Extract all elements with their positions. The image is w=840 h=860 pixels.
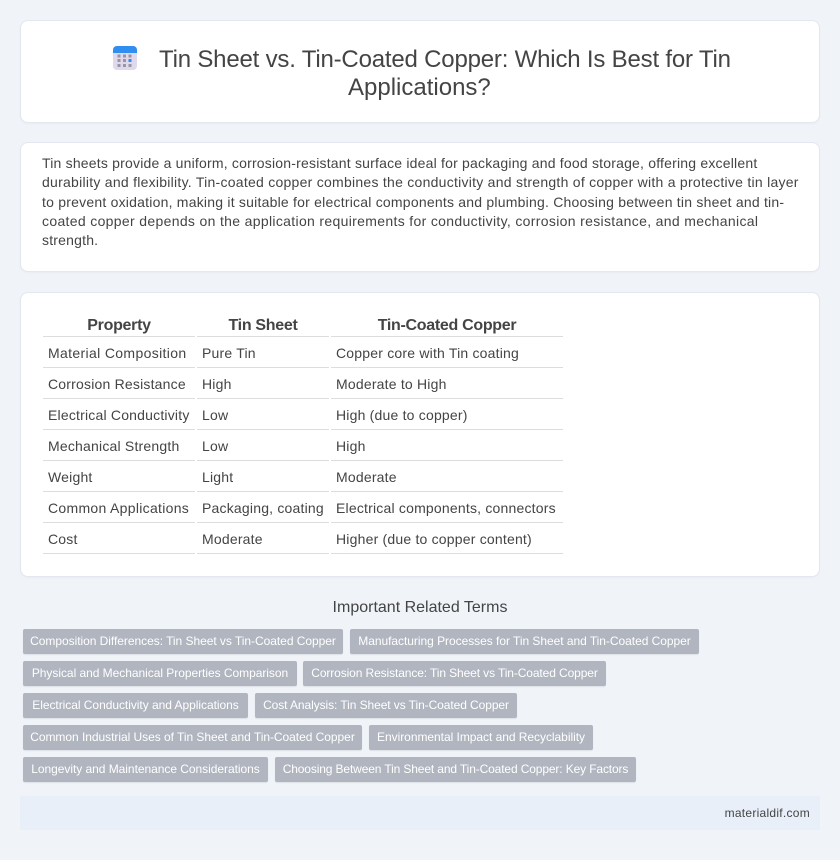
related term tags: Manufacturing Processes for Tin Sheet and Tin-Coated Copper	[358, 634, 691, 648]
comparison table: Low	[202, 407, 228, 423]
comparison table: Packaging, coating	[202, 500, 324, 516]
comparison table: High	[202, 376, 232, 392]
related term tags: Electrical Conductivity and Applications	[32, 698, 239, 712]
related term tags: Corrosion Resistance: Tin Sheet vs Tin-Coated Copper	[311, 666, 598, 680]
heading: related terms: Important Related Terms	[333, 599, 507, 616]
panel: title header	[20, 20, 820, 123]
related term tags	[23, 629, 699, 783]
related term tags: Composition Differences: Tin Sheet vs Tin-Coated Copper	[30, 634, 336, 648]
related term tags: Physical and Mechanical Properties Comparison	[32, 666, 288, 680]
related term tags: Common Industrial Uses of Tin Sheet and Tin-Coated Copper	[30, 730, 355, 744]
title: Applications?	[348, 74, 491, 101]
text block: introduction: strength.	[42, 232, 98, 248]
panel: comparison table	[20, 292, 820, 577]
comparison table: Cost	[48, 531, 78, 547]
comparison table	[43, 317, 563, 554]
comparison table: Common Applications	[48, 500, 189, 516]
related term tags: Longevity and Maintenance Considerations	[31, 762, 260, 776]
related term tags: Cost Analysis: Tin Sheet vs Tin-Coated Copper	[263, 698, 509, 712]
comparison table: Moderate	[202, 531, 263, 547]
comparison table: Corrosion Resistance	[48, 376, 186, 392]
comparison table: Material Composition	[48, 345, 186, 361]
related term tags: Choosing Between Tin Sheet and Tin-Coated Copper: Key Factors	[283, 762, 628, 776]
icon: calendar	[113, 46, 137, 70]
text block: introduction: to prevent oxidation, making it suitable for electrical components and plumbing. Choosing between tin sheet and tin-	[42, 194, 784, 210]
text block: introduction: coated copper depends on the application requirements for conductivity, corrosion resistance, and mechanical	[42, 213, 758, 229]
comparison table: Low	[202, 438, 228, 454]
comparison table: Light	[202, 469, 233, 485]
comparison table: High (due to copper)	[336, 407, 468, 423]
comparison table: Copper core with Tin coating	[336, 345, 519, 361]
comparison table: Moderate	[336, 469, 397, 485]
comparison table: Mechanical Strength	[48, 438, 179, 454]
panel: introduction	[20, 142, 820, 272]
comparison table: Property	[87, 317, 151, 334]
related term tags: Environmental Impact and Recyclability	[377, 730, 585, 744]
comparison table: Electrical Conductivity	[48, 407, 190, 423]
comparison table: High	[336, 438, 366, 454]
comparison table: Tin-Coated Copper	[378, 317, 516, 334]
title: Tin Sheet vs. Tin-Coated Copper: Which Is Best for Tin	[159, 46, 731, 73]
comparison table: Electrical components, connectors	[336, 500, 556, 516]
comparison table: Higher (due to copper content)	[336, 531, 532, 547]
comparison table: Moderate to High	[336, 376, 447, 392]
comparison table: Weight	[48, 469, 93, 485]
comparison table: Pure Tin	[202, 345, 256, 361]
text block: introduction	[42, 155, 799, 248]
text block: introduction: durability and flexibility. Tin-coated copper combines the conductivity and strength of copper with a protective tin layer	[42, 174, 799, 190]
text block: introduction: Tin sheets provide a uniform, corrosion-resistant surface ideal for packaging and food storage, offering excellent	[42, 155, 757, 171]
comparison table: Tin Sheet	[228, 317, 298, 334]
footer	[20, 796, 820, 830]
title	[159, 46, 731, 101]
footer source: materialdif.com	[725, 806, 810, 820]
